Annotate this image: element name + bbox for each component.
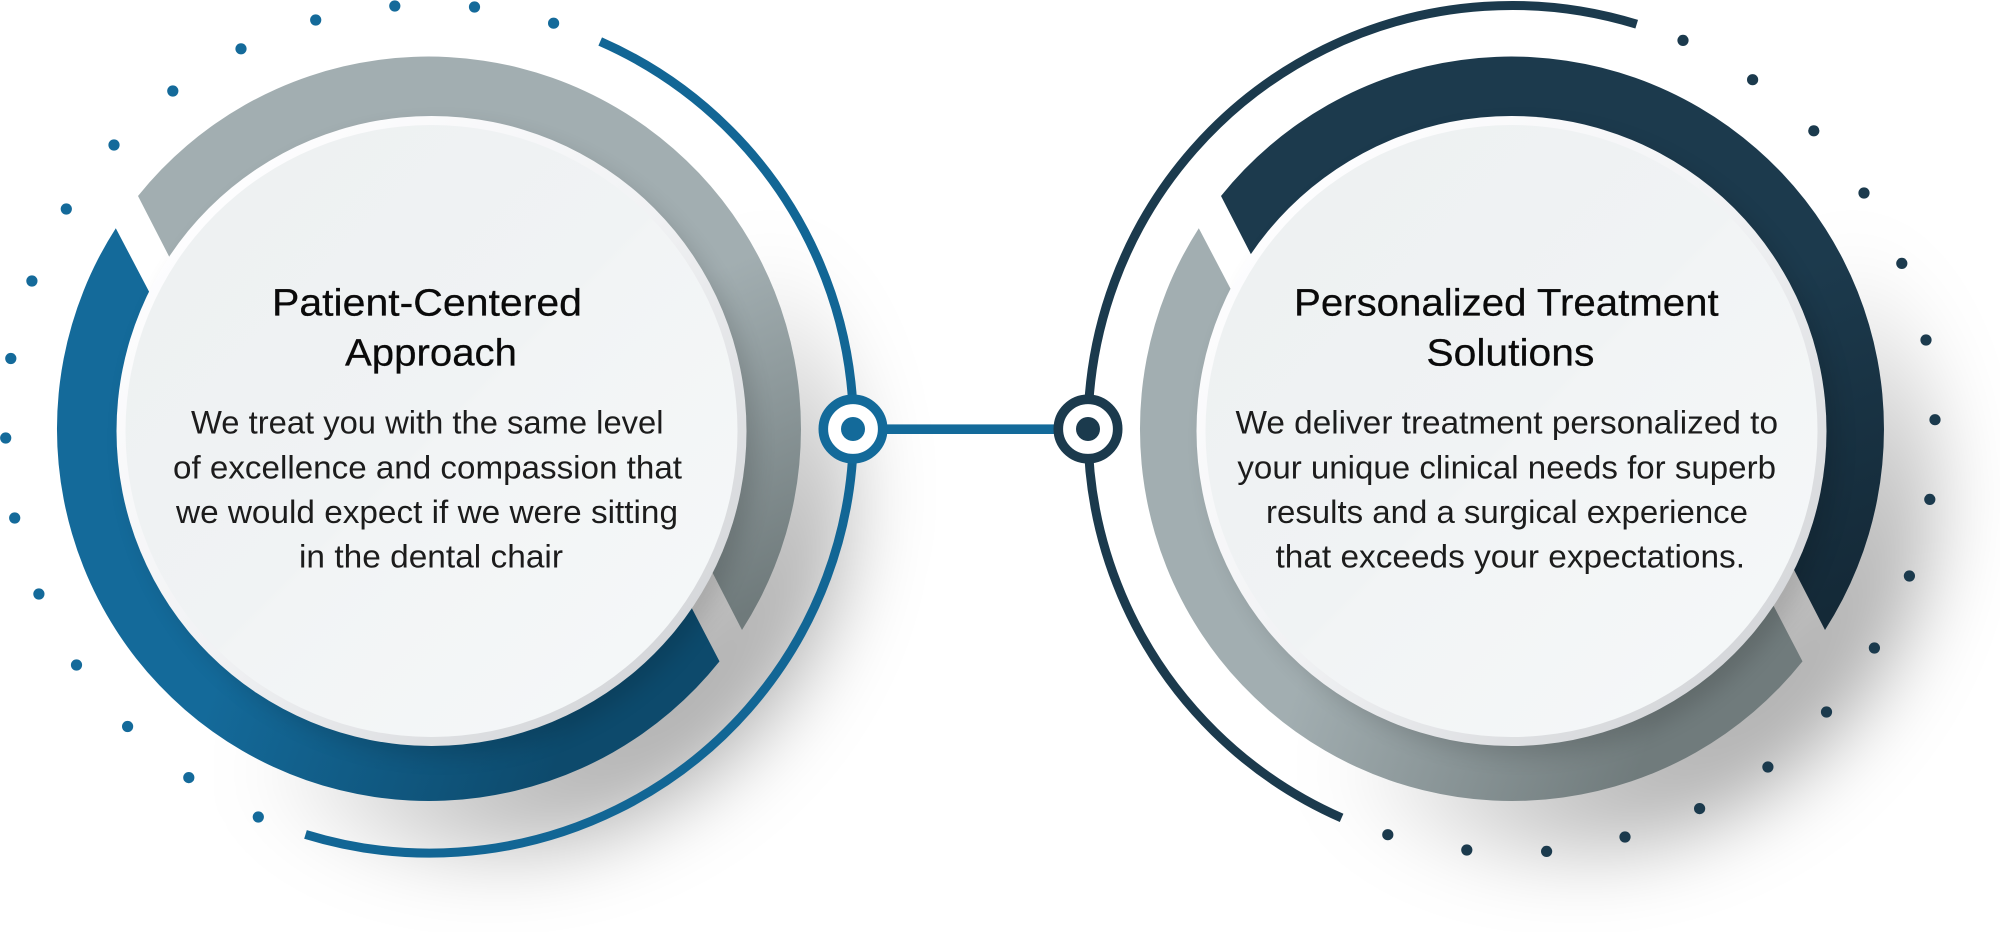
thin outer arc — [306, 42, 854, 853]
gray ring segment — [1140, 228, 1802, 801]
body text — [1236, 404, 1778, 574]
body text: We deliver treatment personalized to — [1236, 404, 1778, 440]
heading: Personalized Treatment — [1294, 283, 1719, 325]
heading — [272, 283, 582, 375]
body text: your unique clinical needs for superb — [1237, 449, 1776, 485]
body text: that exceeds your expectations. — [1276, 538, 1745, 574]
panel: Patient-Centered Approach — [0, 0, 854, 853]
gray ring segment — [138, 57, 801, 630]
body text — [173, 404, 682, 574]
body text: We treat you with the same level — [191, 404, 664, 440]
body text: in the dental chair — [299, 538, 563, 574]
disc shadow — [1207, 126, 1837, 756]
disc rim — [1196, 116, 1826, 746]
heading: Patient-Centered — [272, 283, 582, 325]
disc shadow — [126, 126, 756, 756]
node: left connector — [823, 399, 883, 459]
drop shadow: right circle — [1190, 107, 1934, 851]
blue ring segment — [57, 228, 720, 801]
dotted arc — [1382, 35, 1941, 857]
body text: we would expect if we were sitting — [175, 494, 678, 530]
drop shadow: left circle — [107, 107, 851, 851]
disc face — [126, 125, 738, 737]
heading: Approach — [345, 333, 517, 375]
panel: Personalized Treatment Solutions — [1088, 5, 1941, 857]
connector line — [880, 424, 1062, 434]
node: right connector — [1058, 399, 1118, 459]
body text: results and a surgical experience — [1266, 494, 1748, 530]
disc face — [1206, 125, 1818, 737]
heading — [1294, 283, 1719, 375]
thin outer arc — [1088, 5, 1637, 818]
dotted arc — [0, 0, 559, 823]
heading: Solutions — [1426, 333, 1594, 375]
disc rim — [116, 116, 746, 746]
dark ring segment — [1221, 57, 1884, 630]
body text: of excellence and compassion that — [173, 449, 682, 485]
